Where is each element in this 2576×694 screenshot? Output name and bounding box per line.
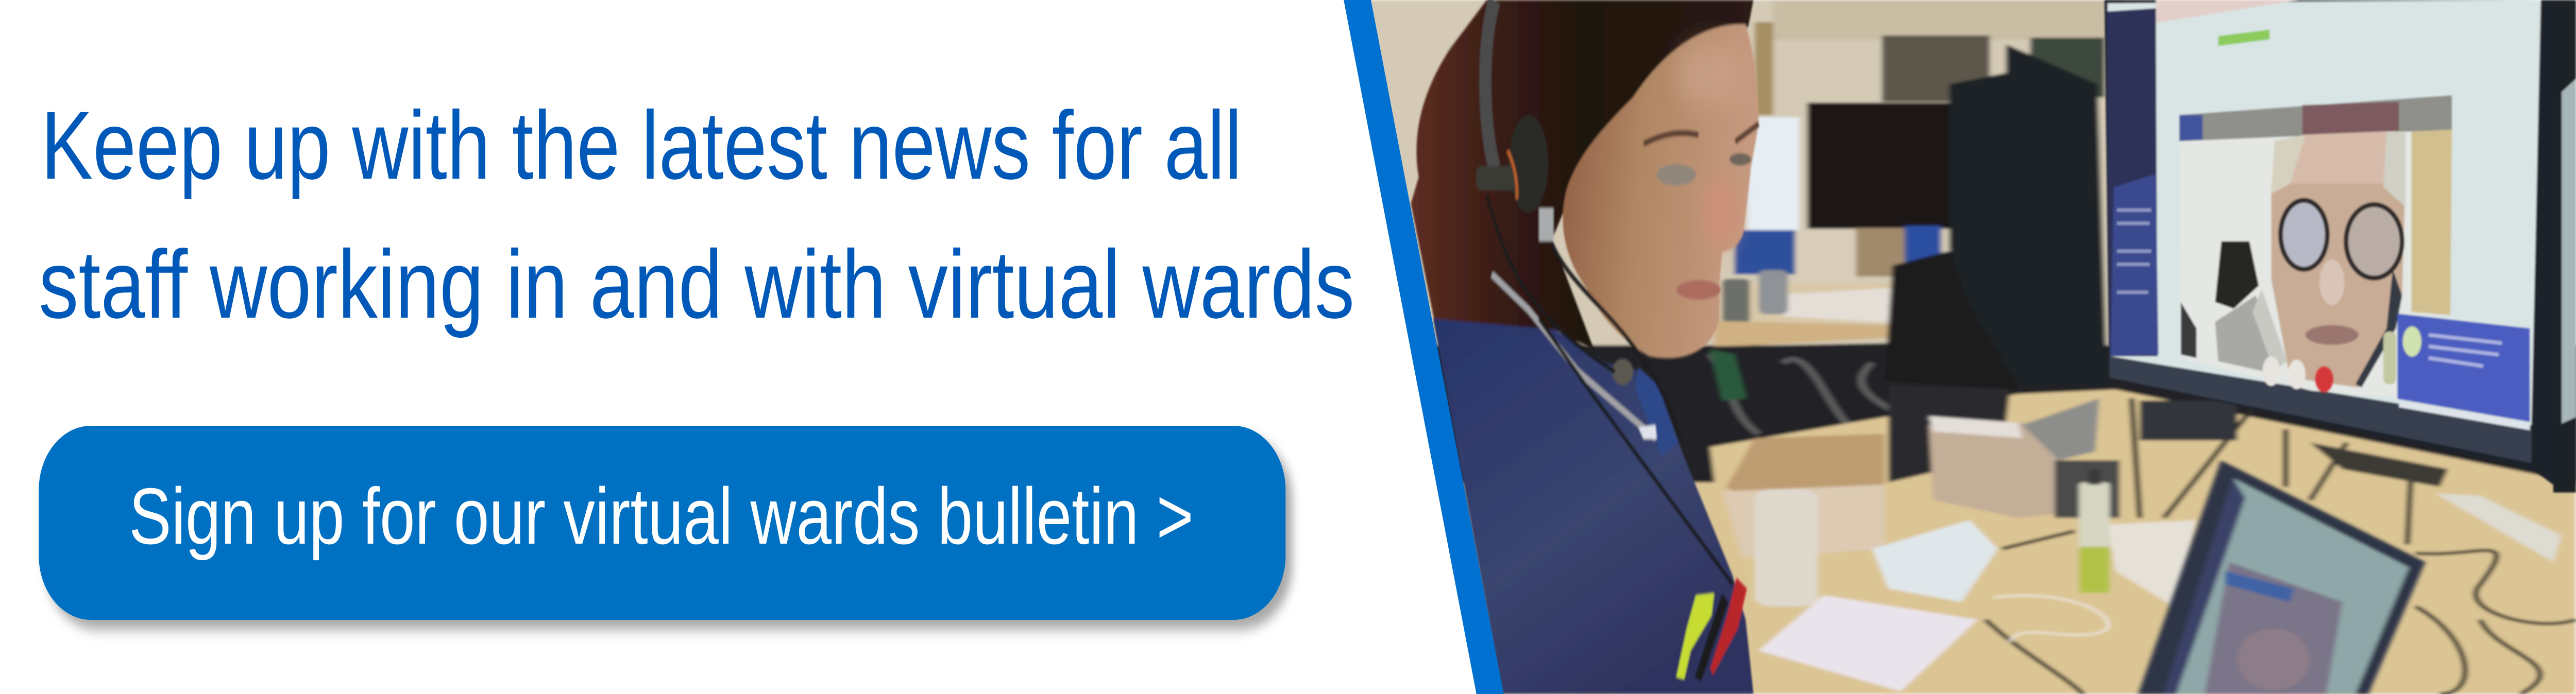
- taskbar: [2109, 356, 2532, 463]
- second monitor: [2553, 0, 2576, 493]
- message notification: [2383, 314, 2530, 430]
- product boxes: [1929, 398, 2120, 518]
- face: [1563, 24, 1759, 358]
- headline: staff working in and with virtual wards: [39, 230, 1354, 338]
- pens in pocket: [1676, 578, 1747, 682]
- screen sidebar: [2107, 8, 2158, 356]
- main monitor with video call: [2105, 0, 2576, 493]
- paper: [2107, 520, 2196, 611]
- headline: Keep up with the latest news for all: [41, 91, 1242, 199]
- button: sign up: [39, 426, 1292, 630]
- laptop: [2138, 460, 2425, 694]
- headline: [39, 91, 1354, 338]
- video caller face: [2252, 131, 2405, 388]
- hand sanitiser bottle: [2079, 469, 2110, 593]
- headset: [1476, 0, 1733, 584]
- cables: [1986, 398, 2576, 694]
- tissue: [1872, 520, 1998, 602]
- notebook: [1759, 595, 1978, 691]
- button: sign up: Sign up for our virtual wards bulletin >: [129, 472, 1194, 561]
- video window: [2179, 95, 2452, 397]
- nurse: [1411, 0, 1759, 694]
- hair: [1411, 0, 1753, 350]
- uniform: [1433, 319, 1753, 694]
- photo: nurse on a video call at a desk: [1353, 0, 2576, 694]
- office background and desk: [1353, 0, 2576, 694]
- cardboard box: [1722, 434, 1885, 558]
- blue diagonal stripe: [1344, 0, 1504, 694]
- spotted mug: [1755, 489, 1818, 606]
